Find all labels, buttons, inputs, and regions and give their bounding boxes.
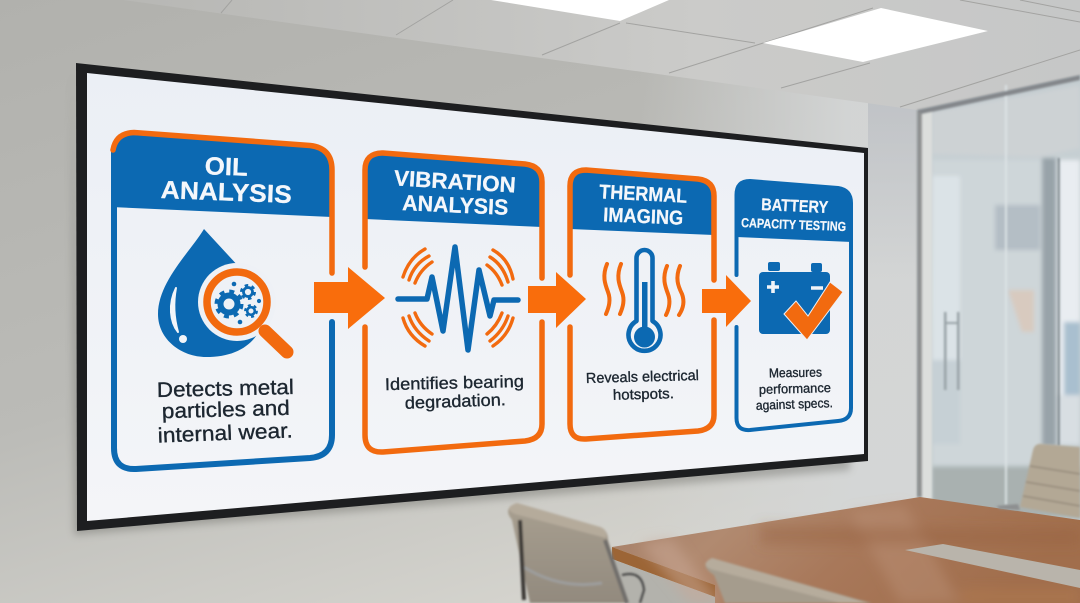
conference table bbox=[612, 497, 1080, 603]
heading: vibration analysis: VIBRATION bbox=[393, 165, 517, 198]
heading: battery capacity testing: BATTERY bbox=[761, 195, 829, 217]
icon: vibration waveform bbox=[398, 247, 518, 350]
description: thermal imaging: Reveals electrical bbox=[586, 368, 699, 387]
icon: thermometer with heat waves bbox=[604, 250, 683, 351]
glass partition bbox=[917, 75, 1080, 520]
icon: battery with check mark bbox=[759, 262, 843, 340]
description: thermal imaging bbox=[586, 368, 699, 404]
gears bbox=[216, 285, 257, 317]
heading: thermal imaging bbox=[599, 181, 688, 230]
panel: thermal imaging bbox=[570, 170, 714, 439]
description: battery capacity testing: performance bbox=[759, 380, 831, 397]
description: oil analysis: Detects metal bbox=[157, 376, 294, 402]
description: oil analysis: internal wear. bbox=[157, 419, 293, 448]
screen shadow bbox=[72, 70, 850, 535]
wall display surface bbox=[87, 73, 864, 521]
chair: front left bbox=[508, 503, 644, 603]
heading: oil analysis bbox=[160, 152, 292, 209]
heading: thermal imaging: THERMAL bbox=[599, 181, 688, 208]
arrow: oil to vibration bbox=[314, 267, 385, 329]
heading: vibration analysis bbox=[393, 165, 517, 220]
chair: front centre bbox=[705, 558, 872, 603]
table grommet bbox=[905, 544, 1080, 588]
description: battery capacity testing: against specs. bbox=[756, 395, 833, 413]
panel: battery capacity testing bbox=[736, 181, 852, 430]
heading: vibration analysis: ANALYSIS bbox=[402, 190, 509, 220]
description: thermal imaging: hotspots. bbox=[613, 386, 674, 404]
heading: oil analysis: ANALYSIS bbox=[160, 176, 292, 209]
ceiling bbox=[123, 0, 1080, 128]
description: vibration analysis bbox=[385, 372, 524, 413]
heading: oil analysis: OIL bbox=[204, 152, 248, 182]
ceiling lights bbox=[491, 0, 1080, 128]
description: battery capacity testing bbox=[756, 365, 833, 413]
description: oil analysis bbox=[157, 376, 294, 448]
description: oil analysis: particles and bbox=[162, 397, 290, 423]
description: battery capacity testing: Measures bbox=[769, 365, 823, 380]
heading: battery capacity testing bbox=[741, 195, 846, 234]
heading: thermal imaging: IMAGING bbox=[603, 204, 684, 230]
heading: battery capacity testing: CAPACITY TESTING bbox=[741, 215, 846, 234]
arrow: vibration to thermal bbox=[528, 272, 586, 328]
wall display frame bbox=[76, 63, 868, 531]
description: vibration analysis: degradation. bbox=[405, 390, 506, 413]
panel: vibration analysis bbox=[365, 153, 542, 452]
icon: oil drop with magnifier bbox=[158, 229, 287, 357]
description: vibration analysis: Identifies bearing bbox=[385, 372, 524, 394]
panel: oil analysis bbox=[111, 132, 332, 469]
chair: right bbox=[996, 444, 1080, 518]
arrow: thermal to battery bbox=[702, 275, 751, 327]
